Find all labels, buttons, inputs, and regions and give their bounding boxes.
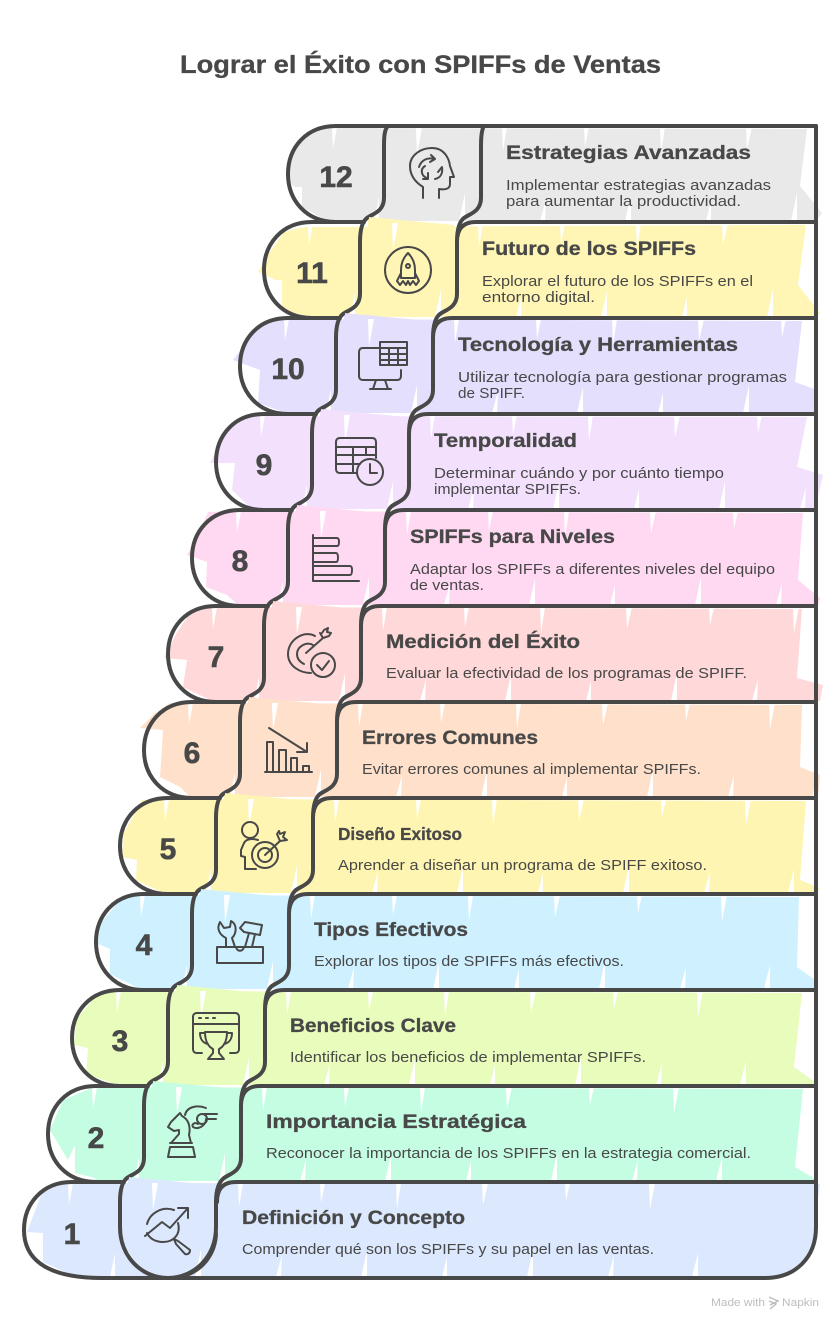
- step 4: Tipos Efectivos: [96, 889, 816, 990]
- number 2: 2: [88, 1122, 104, 1155]
- description: Utilizar tecnología para gestionar programas: [458, 370, 787, 386]
- step 10: Tecnología y Herramientas: [233, 313, 840, 414]
- heading: Beneficios Clave: [290, 1016, 456, 1037]
- description: Reconocer la importancia de los SPIFFs en la estrategia comercial.: [266, 1146, 751, 1162]
- heading: Definición y Concepto: [242, 1208, 465, 1229]
- heading: Errores Comunes: [362, 728, 538, 749]
- icon: chess knight with target: [168, 1106, 217, 1157]
- icon: person with target: [241, 822, 287, 869]
- description: [506, 178, 771, 210]
- right border of the staircase: [765, 126, 816, 1278]
- heading: Tecnología y Herramientas: [458, 335, 738, 356]
- number 3: 3: [112, 1025, 128, 1058]
- description: Aprender a diseñar un programa de SPIFF exitoso.: [338, 858, 707, 874]
- step 12: Estrategias Avanzadas: [288, 126, 840, 222]
- heading: Futuro de los SPIFFs: [482, 239, 696, 260]
- description: implementar SPIFFs.: [434, 482, 581, 498]
- icon: declining bars with arrow: [265, 728, 312, 772]
- description: Explorar el futuro de los SPIFFs en el: [482, 274, 753, 290]
- number 10: 10: [271, 353, 305, 386]
- description: [458, 370, 787, 402]
- description: Determinar cuándo y por cuánto tiempo: [434, 466, 724, 482]
- number 11: 11: [296, 257, 328, 290]
- description: [434, 466, 724, 498]
- step 1: Definición y Concepto: [24, 1177, 820, 1279]
- icon: monitor with table: [359, 342, 407, 389]
- step 6: Errores Comunes: [140, 697, 820, 798]
- step 8: SPIFFs para Niveles: [187, 505, 840, 606]
- icon: horizontal bar chart: [313, 535, 359, 581]
- footer: Made with Napkin: [711, 1297, 819, 1309]
- heading: Tipos Efectivos: [314, 920, 468, 941]
- icon: head with circular arrows: [410, 148, 454, 198]
- step 3: Beneficios Clave: [72, 985, 816, 1086]
- footer: Made with Napkin: Made with: [711, 1297, 765, 1309]
- icon: target with check: [288, 628, 335, 677]
- description: para aumentar la productividad.: [506, 194, 741, 210]
- icon: rocket: [385, 247, 431, 293]
- title: Lograr el Éxito con SPIFFs de Ventas: [180, 50, 661, 79]
- step 2: Importancia Estratégica: [48, 1081, 817, 1182]
- number 8: 8: [232, 545, 248, 578]
- step 11: Futuro de los SPIFFs: [258, 217, 840, 318]
- description: Explorar los tipos de SPIFFs más efectivos.: [314, 954, 624, 970]
- description: Evaluar la efectividad de los programas de SPIFF.: [386, 666, 747, 682]
- heading: Diseño Exitoso: [338, 824, 462, 844]
- heading: Temporalidad: [434, 431, 577, 452]
- heading: SPIFFs para Niveles: [410, 527, 615, 548]
- number 5: 5: [160, 833, 176, 866]
- description: [410, 562, 775, 594]
- description: [482, 274, 753, 306]
- description: de SPIFF.: [458, 386, 525, 402]
- description: Implementar estrategias avanzadas: [506, 178, 771, 194]
- icon: toolbox with wrench and hammer: [217, 921, 263, 963]
- description: Adaptar los SPIFFs a diferentes niveles del equipo: [410, 562, 775, 578]
- description: Evitar errores comunes al implementar SPIFFs.: [362, 762, 701, 778]
- description: de ventas.: [410, 578, 484, 594]
- heading: Importancia Estratégica: [266, 1112, 527, 1133]
- number 12: 12: [319, 161, 353, 194]
- icon: magnifier with growth arrow: [145, 1208, 190, 1254]
- icon: browser window with trophy: [193, 1013, 239, 1059]
- step 9: Temporalidad: [210, 409, 840, 510]
- description: Identificar los beneficios de implementar SPIFFs.: [290, 1050, 646, 1066]
- heading: Estrategias Avanzadas: [506, 143, 751, 164]
- description: entorno digital.: [482, 290, 595, 306]
- number 6: 6: [184, 737, 200, 770]
- icon: table with clock: [336, 438, 383, 485]
- number 1: 1: [64, 1218, 80, 1251]
- footer: Made with Napkin: Napkin: [782, 1297, 819, 1309]
- number 7: 7: [208, 641, 224, 674]
- number 9: 9: [256, 449, 272, 482]
- number 4: 4: [136, 929, 153, 962]
- heading: Medición del Éxito: [386, 631, 580, 653]
- step 7: Medición del Éxito: [164, 601, 840, 702]
- description: Comprender qué son los SPIFFs y su papel en las ventas.: [242, 1242, 654, 1258]
- step 5: Diseño Exitoso: [120, 793, 820, 894]
